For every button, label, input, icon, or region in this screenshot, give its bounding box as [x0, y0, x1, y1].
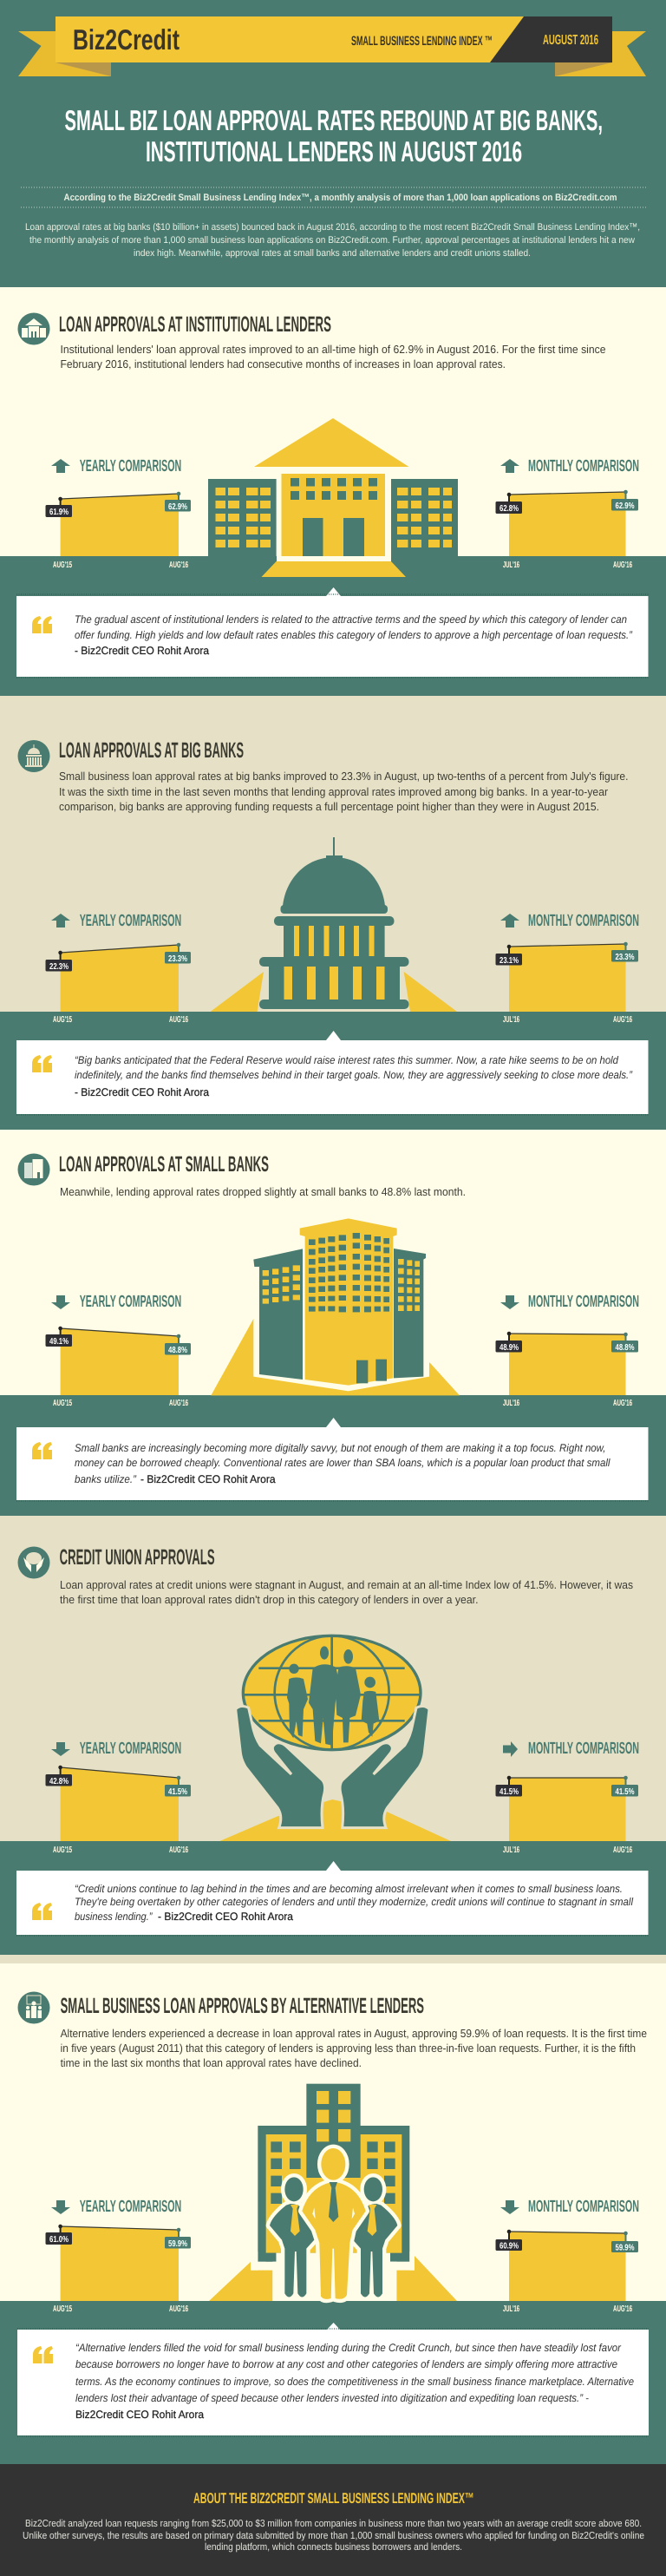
chart: yearly comparison: 62.9%	[168, 502, 187, 512]
callout: CEO quote	[16, 1861, 649, 1936]
chart: yearly comparison: AUG'15	[53, 2304, 72, 2314]
quote text: - Biz2Credit CEO Rohit Arora	[75, 645, 209, 657]
quote text: offer funding. High yields and low default rates enables this category of lenders to approve a high percentage of loan requests.”	[75, 629, 633, 641]
title	[64, 104, 603, 167]
callout: CEO quote	[16, 1418, 649, 1501]
chart: yearly comparison: AUG'16	[169, 1845, 188, 1855]
chart: yearly comparison: YEARLY COMPARISON	[80, 1293, 181, 1311]
quote text	[75, 1054, 633, 1098]
person: center	[302, 2148, 366, 2299]
chart: monthly comparison: 62.8%	[500, 504, 519, 514]
quote text: Small banks are increasingly becoming more digitally savvy, but not enough of them are making it a top focus. Right now,	[75, 1442, 605, 1454]
chart: monthly comparison: JUL'16	[503, 1845, 519, 1855]
quote text	[75, 613, 633, 657]
chart: monthly comparison	[496, 1293, 639, 1408]
quote text: business lending.”	[75, 1911, 153, 1923]
chart: yearly comparison: AUG'15	[53, 1015, 72, 1025]
body text: Small business loan approval rates at big banks improved to 23.3% in August, up two-tenths of a percent from July's figure.	[59, 770, 628, 783]
chart: yearly comparison: AUG'15	[53, 1845, 72, 1855]
quote text: lenders lost their advantage of speed because other lenders invested into digitization and expediting loan requests.” -	[75, 2392, 589, 2404]
body text: comparison, big banks are approving funding requests a full percentage point higher than they were in August 2015.	[59, 800, 599, 813]
logo: Biz2Credit	[73, 23, 180, 56]
chart: monthly comparison: AUG'16	[613, 2304, 632, 2314]
chart: monthly comparison: 41.5%	[616, 1787, 635, 1797]
chart: yearly comparison: 59.9%	[168, 2239, 187, 2249]
ribbon banner	[18, 16, 646, 76]
chart: yearly comparison: YEARLY COMPARISON	[80, 2198, 181, 2216]
left hand	[236, 1707, 325, 1828]
person: left	[270, 2177, 314, 2297]
globe	[243, 1635, 421, 1750]
illustration: office towers	[211, 1218, 460, 1395]
panel: big banks	[0, 696, 666, 1130]
callout: CEO quote	[16, 1031, 649, 1115]
chart: yearly comparison: YEARLY COMPARISON	[80, 912, 181, 930]
subtitle: According to the Biz2Credit Small Business Lending Index™, a monthly analysis of more than 1,000 loan applications on Biz2Credit.com	[64, 193, 617, 203]
chart: yearly comparison: YEARLY COMPARISON	[80, 1740, 181, 1758]
body text: Institutional lenders' loan approval rates improved to an all-time high of 62.9% in August 2016. For the first time since	[61, 343, 605, 356]
building	[251, 2084, 415, 2301]
chart: yearly comparison: AUG'15	[53, 560, 72, 570]
chart: yearly comparison	[45, 1740, 191, 1855]
quote text: money can be borrowed cheaply. Conventional rates are lower than SBA loans, which is a popular loan product that small	[75, 1457, 611, 1469]
chart: monthly comparison: 59.9%	[616, 2244, 635, 2252]
body text: the first time that loan approval rates didn't drop in this category of lenders in over a year.	[60, 1593, 479, 1606]
chart: yearly comparison: AUG'16	[169, 2304, 188, 2314]
chart: yearly comparison: 23.3%	[168, 954, 187, 964]
panel: credit unions	[0, 1516, 666, 1963]
chart: monthly comparison: JUL'16	[503, 1015, 519, 1025]
chart: monthly comparison: 60.9%	[500, 2242, 519, 2251]
heading: LOAN APPROVALS AT INSTITUTIONAL LENDERS	[59, 312, 331, 337]
heading: LOAN APPROVALS AT SMALL BANKS	[59, 1152, 269, 1177]
icon: quote mark	[32, 1903, 52, 1920]
chart: monthly comparison: JUL'16	[503, 560, 519, 570]
chart: monthly comparison	[496, 457, 639, 570]
footer text: lending platform, which connects business borrowers and lenders.	[205, 2542, 462, 2553]
chart: monthly comparison: AUG'16	[613, 1015, 632, 1025]
quote text: “Alternative lenders filled the void for small business lending during the Credit Crunch, but since then have steadily lost favor	[75, 2342, 622, 2354]
body text: time in the last six months that loan approval rates have declined.	[61, 2056, 362, 2069]
chart: yearly comparison: 48.8%	[168, 1346, 187, 1355]
chart: yearly comparison: AUG'16	[169, 1399, 188, 1408]
quote text	[75, 1442, 611, 1485]
body text	[59, 770, 628, 813]
panel: small banks	[0, 1130, 666, 1517]
footer heading: ABOUT THE BIZ2CREDIT SMALL BUSINESS LENDING INDEX™	[193, 2490, 474, 2507]
illustration: capitol building	[211, 837, 457, 1012]
icon: capitol	[17, 740, 50, 772]
chart: yearly comparison: YEARLY COMPARISON	[80, 457, 181, 475]
right hand	[340, 1707, 429, 1828]
chart: yearly comparison	[45, 1293, 191, 1408]
panel: institutional lenders	[0, 287, 666, 696]
chart: monthly comparison: JUL'16	[503, 2304, 519, 2314]
body text: Meanwhile, lending approval rates dropped slightly at small banks to 48.8% last month.	[60, 1185, 466, 1198]
chart: yearly comparison: AUG'16	[169, 1015, 188, 1025]
quote text: “Big banks anticipated that the Federal Reserve would raise interest rates this summer. Now, a rate hike seems to be on hold	[75, 1054, 619, 1066]
icon: institution	[17, 312, 50, 345]
body text	[60, 1578, 633, 1606]
chart: yearly comparison: AUG'16	[169, 560, 188, 570]
intro paragraph	[25, 222, 640, 259]
chart: yearly comparison	[45, 2198, 191, 2314]
chart: yearly comparison: 22.3%	[49, 962, 69, 972]
illustration: business people and building	[209, 2084, 457, 2301]
quote text	[75, 2342, 634, 2421]
callout: CEO quote	[17, 2323, 649, 2436]
icon: business people	[17, 1992, 50, 2023]
icon: quote mark	[32, 1442, 52, 1459]
panel: footer about	[0, 2464, 666, 2576]
family silhouette	[287, 1646, 379, 1746]
quote text: because borrowers no longer have to borrow at any cost and other categories of lenders are simply offering more attractive	[75, 2358, 617, 2370]
heading: LOAN APPROVALS AT BIG BANKS	[59, 738, 244, 763]
quote text: banks utilize.”	[75, 1473, 137, 1485]
icon: quote mark	[32, 616, 52, 633]
chart: yearly comparison: AUG'15	[53, 1399, 72, 1408]
quote text: - Biz2Credit CEO Rohit Arora	[140, 1473, 276, 1485]
quote text: The gradual ascent of institutional lenders is related to the attractive terms and the speed by which this category of lender can	[75, 613, 627, 626]
quote text: They're being overtaken by other categories of lenders and until they modernize, credit unions will continue to stagnant in small	[75, 1896, 634, 1908]
body text	[61, 2027, 647, 2069]
chart: monthly comparison: 23.3%	[616, 953, 635, 962]
body text: Loan approval rates at credit unions were stagnant in August, and remain at an all-time Index low of 41.5%. However, it was	[60, 1578, 633, 1591]
chart: monthly comparison: 62.9%	[616, 501, 635, 511]
chart: yearly comparison	[45, 912, 191, 1025]
chart: yearly comparison: 49.1%	[49, 1337, 69, 1347]
intro paragraph: index high. Meanwhile, approval rates at small banks and alternative lenders and credit unions stalled.	[134, 248, 531, 259]
callout: CEO quote	[16, 587, 649, 678]
quote text: - Biz2Credit CEO Rohit Arora	[75, 1086, 209, 1098]
chart: monthly comparison: AUG'16	[613, 560, 632, 570]
chart: yearly comparison: 61.9%	[49, 508, 69, 517]
icon: quote mark	[33, 2346, 53, 2363]
chart: yearly comparison: 42.8%	[49, 1777, 69, 1786]
chart: monthly comparison	[496, 2198, 639, 2314]
person: right	[353, 2177, 397, 2297]
quote text: - Biz2Credit CEO Rohit Arora	[158, 1911, 293, 1923]
icon: quote mark	[32, 1055, 52, 1072]
chart: monthly comparison	[496, 1740, 639, 1855]
panel: alternative lenders	[0, 1963, 666, 2464]
ribbon date: AUGUST 2016	[543, 33, 598, 48]
ribbon label: SMALL BUSINESS LENDING INDEX ™	[351, 34, 493, 49]
illustration: hands holding globe with family	[219, 1635, 451, 1841]
quote text: Biz2Credit CEO Rohit Arora	[75, 2409, 204, 2421]
body text: It was the sixth time in the last seven months that lending approval rates improved among big banks. In a year-to-year	[59, 785, 609, 798]
chart: monthly comparison: 23.1%	[500, 956, 519, 966]
chart: yearly comparison: 61.0%	[49, 2235, 69, 2245]
footer text	[23, 2519, 644, 2553]
icon: globe and hands	[17, 1546, 50, 1579]
body text	[61, 343, 605, 370]
heading: CREDIT UNION APPROVALS	[60, 1545, 215, 1570]
chart: monthly comparison: 48.9%	[500, 1343, 519, 1353]
chart: monthly comparison: AUG'16	[613, 1399, 632, 1408]
quote text: “Credit unions continue to lag behind in the times and are becoming almost irrelevant when it comes to small business loans.	[75, 1883, 623, 1895]
chart: monthly comparison: 41.5%	[500, 1787, 519, 1797]
chart: monthly comparison	[496, 912, 639, 1025]
chart: monthly comparison: 48.8%	[616, 1343, 635, 1353]
quote text	[75, 1883, 634, 1923]
chart: yearly comparison	[45, 457, 191, 570]
chart: yearly comparison: 41.5%	[168, 1787, 187, 1797]
chart: monthly comparison: JUL'16	[503, 1399, 519, 1408]
icon: office tower	[17, 1154, 50, 1185]
body text: February 2016, institutional lenders had consecutive months of increases in loan approval rates.	[61, 357, 506, 370]
illustration: institution building	[208, 418, 458, 577]
chart: monthly comparison: AUG'16	[613, 1845, 632, 1855]
panel: header	[0, 0, 666, 287]
